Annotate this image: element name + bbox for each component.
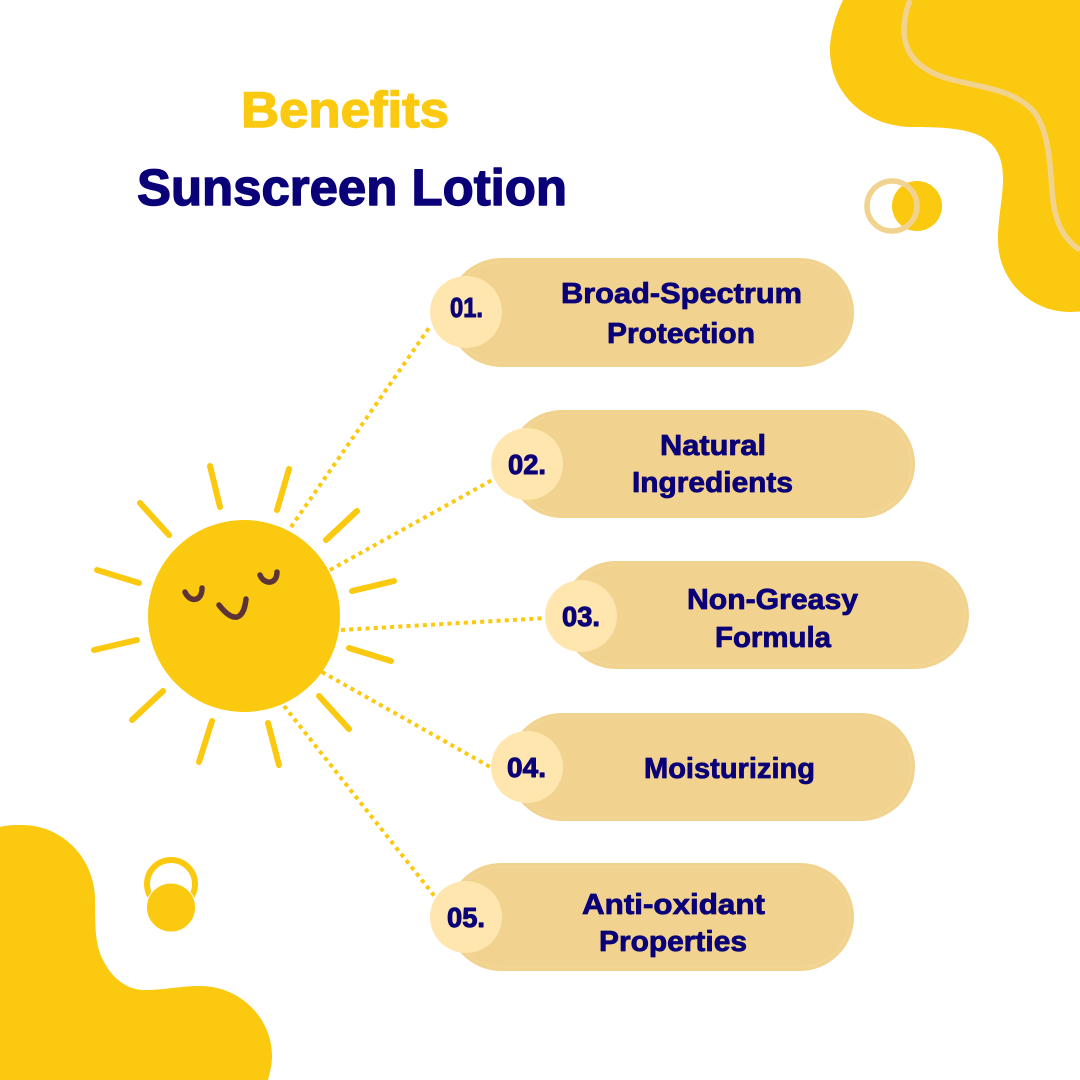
decorative ring and circle: bottom left [146,860,196,932]
sun disc [148,520,340,712]
item 01: Broad-Spectrum Protection: Protection [607,318,755,350]
item 01: Broad-Spectrum Protection [430,258,854,367]
item 02: Natural Ingredients: Natural [660,430,766,462]
decorative blob: top right [830,0,1080,312]
title: Sunscreen Lotion: Sunscreen Lotion [137,159,567,216]
icon: smiling sun [94,466,394,765]
sun rays [94,466,394,765]
item 05: Anti-oxidant Properties: 05. [447,902,485,933]
item 02: Natural Ingredients: Ingredients [632,467,793,499]
item 05: Anti-oxidant Properties [430,863,854,971]
heading: Benefits: Benefits [241,82,449,138]
item 01: Broad-Spectrum Protection: Broad-Spectrum [561,278,802,310]
item 05: Anti-oxidant Properties: Anti-oxidant [582,889,765,921]
sun face [185,572,277,617]
item 04: Moisturizing: 04. [507,752,546,783]
item 02: Natural Ingredients [491,410,915,518]
item 01: Broad-Spectrum Protection: 01. [450,292,483,323]
item 03: Non-Greasy Formula [545,561,969,669]
decorative overlapping circles: top right [867,181,942,231]
item 02: Natural Ingredients: 02. [508,449,546,480]
item 04: Moisturizing [491,713,915,821]
item 05: Anti-oxidant Properties: Properties [599,926,747,958]
item 04: Moisturizing: Moisturizing [644,753,815,785]
dotted connectors from sun to items [284,325,546,898]
decorative blob: bottom left [0,825,272,1080]
item 03: Non-Greasy Formula: Formula [715,622,832,654]
item 03: Non-Greasy Formula: Non-Greasy [687,584,858,616]
item 03: Non-Greasy Formula: 03. [562,601,600,632]
